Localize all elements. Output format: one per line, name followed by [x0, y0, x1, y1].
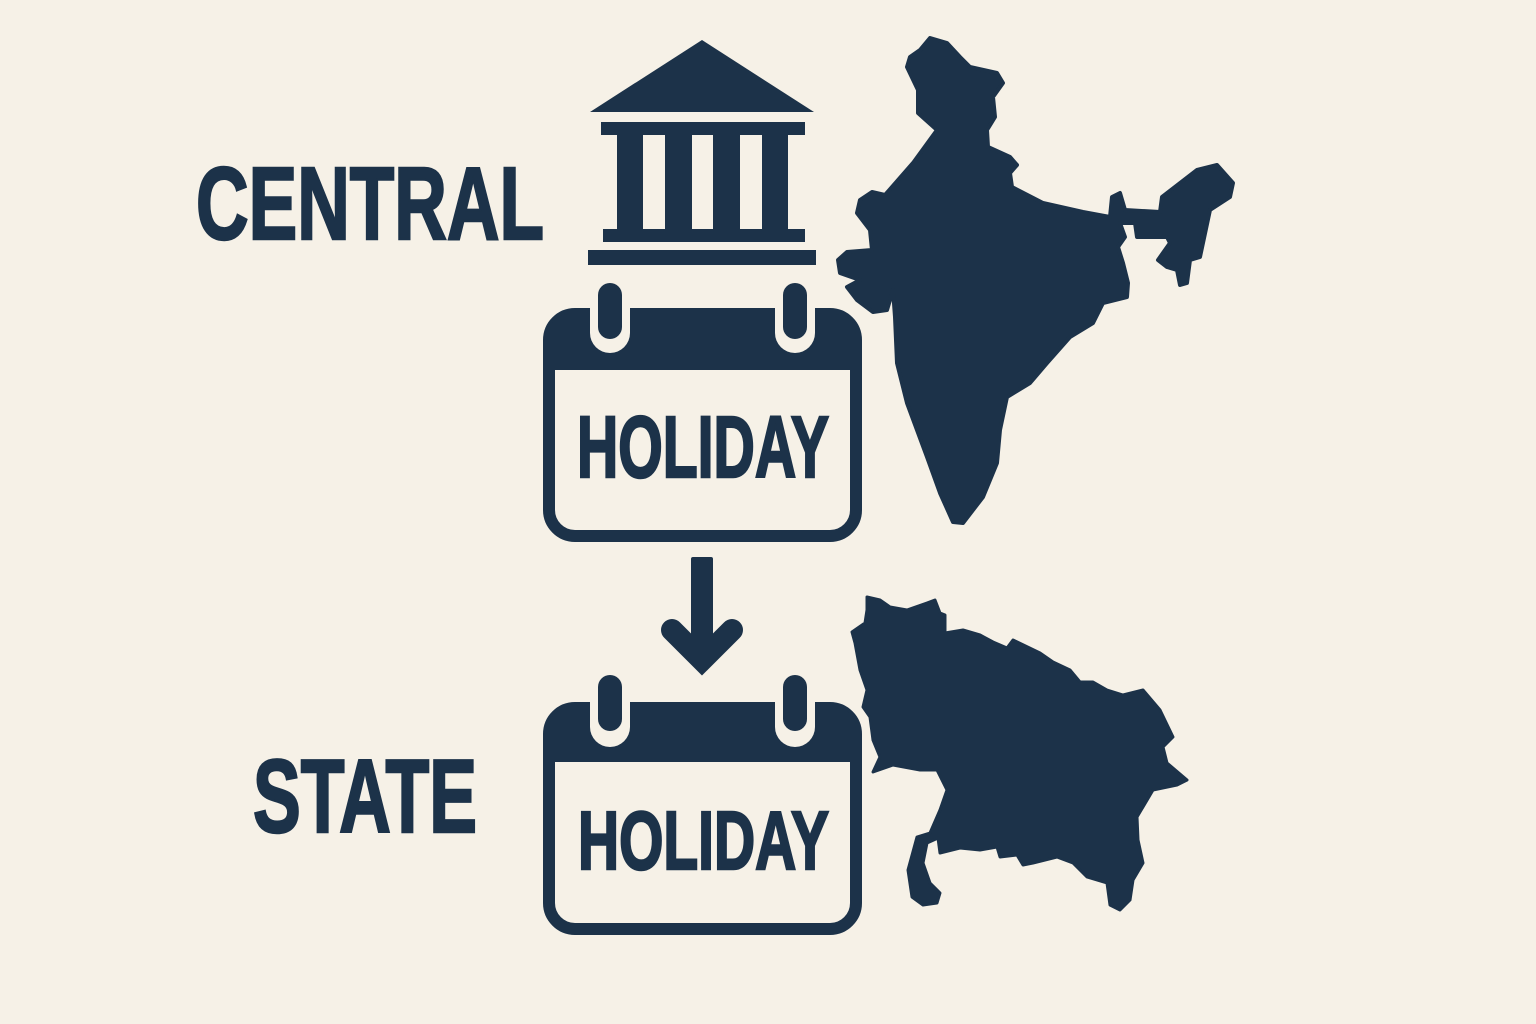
map: India: [838, 38, 1233, 523]
text: HOLIDAY state: HOLIDAY: [578, 794, 829, 887]
text: HOLIDAY central: HOLIDAY: [577, 399, 829, 496]
icon: government building: [588, 40, 816, 265]
title: CENTRAL: CENTRAL: [196, 146, 544, 261]
icon: calendar state holiday: [549, 675, 856, 929]
icon: calendar central holiday: [549, 283, 856, 536]
title: STATE: STATE: [253, 739, 477, 855]
map: Uttar Pradesh: [852, 597, 1187, 910]
arrow: down: [672, 557, 732, 660]
